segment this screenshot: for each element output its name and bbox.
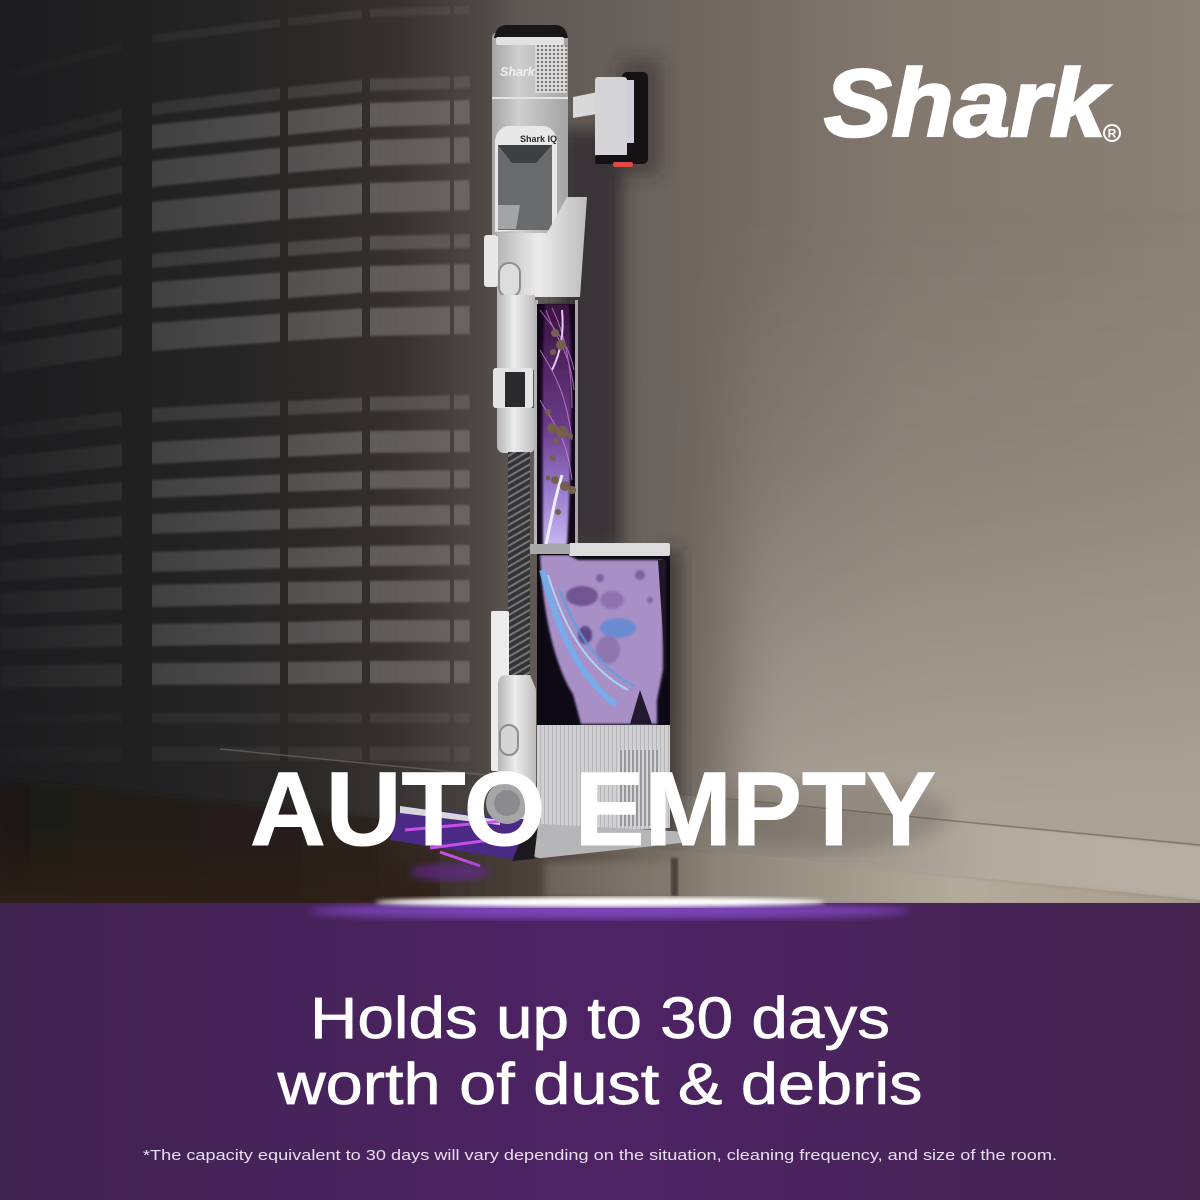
dock bin: [530, 543, 670, 726]
vacuum motor head: [492, 25, 568, 142]
floor: [0, 780, 1200, 905]
floor reflection: [410, 858, 678, 898]
soft shadow behind heading: [710, 780, 950, 850]
background: wall: [0, 0, 1200, 905]
handle body: [484, 197, 587, 297]
logo: Shark: Shark: [824, 50, 1111, 157]
panel: purple caption band: [0, 897, 1200, 1200]
caption text: [276, 986, 922, 1117]
dust cup: Shark IQ: [520, 134, 557, 144]
caption text: worth of dust & debris: [276, 1052, 922, 1117]
glow line: [310, 897, 910, 919]
foot joint: [498, 675, 536, 819]
window blinds shadow pattern: [0, 10, 470, 754]
wall mounted accessory: [573, 72, 648, 167]
back panel: [491, 611, 509, 771]
logo: Shark: R: [1108, 126, 1117, 140]
vacuum motor head: Shark: [500, 65, 536, 79]
caption text: Holds up to 30 days: [310, 986, 890, 1051]
vacuum wall shadow: [560, 60, 680, 840]
vacuum cleaner and dock: [390, 25, 690, 866]
dock base: [528, 725, 690, 858]
heading: AUTO EMPTY: AUTO EMPTY: [250, 751, 936, 868]
baseboard: [0, 727, 1200, 900]
wand: [493, 295, 538, 676]
floor nozzle: [390, 782, 538, 866]
dust cup: [492, 125, 568, 235]
footnote: *The capacity equivalent to 30 days will vary depending on the situation, cleaning frequency, and size of the room.: [143, 1147, 1057, 1164]
chute with swirling debris: [537, 300, 578, 545]
